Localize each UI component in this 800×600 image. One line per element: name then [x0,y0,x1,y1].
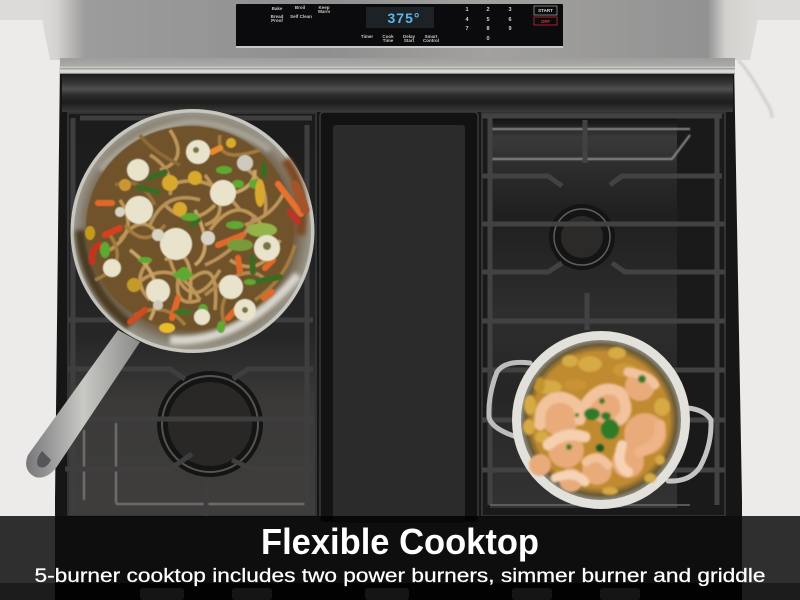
oven function labels: Delay [403,34,415,39]
oven function labels: Warm [318,9,330,14]
oven function labels: Cook [382,34,394,39]
oven function labels: Bake [272,6,283,11]
keypad digits: 2 [486,7,490,13]
oven function labels: Timer [361,34,373,39]
oven function labels: Proof [271,18,283,23]
keypad digits: 4 [465,17,469,23]
carrots [92,148,305,322]
oven function labels: Smart [425,34,438,39]
keypad digits: 9 [508,26,512,32]
right burner area [482,113,725,516]
keypad digits: 7 [465,26,469,32]
oven function labels: Time [383,38,394,43]
chrome burner tray highlights [490,129,690,159]
oven function labels: Bread [271,14,284,19]
parsley [566,375,646,452]
start and off buttons: OFF [541,19,550,24]
small pot [512,331,690,509]
burner knobs [140,588,640,600]
title: Flexible Cooktop [261,521,539,562]
back vent strip [62,74,733,112]
keypad digits: 6 [508,17,512,23]
shrimp curls [540,372,660,482]
control panel [236,4,563,48]
range body [55,60,742,600]
oven function labels [271,5,439,43]
pot handles [489,362,711,481]
wall behind range [0,0,800,20]
shrimp bodies [529,371,666,492]
left burner area [65,113,316,516]
keypad digits: 1 [465,7,469,13]
stir fry food [85,126,305,333]
caption band [0,516,800,600]
oven function labels: Keep [318,5,330,10]
lower range body under caption [55,516,742,583]
griddle [320,112,478,523]
left grate bars [65,118,313,516]
darker lower strip [0,583,800,600]
keypad digits [465,7,512,42]
keypad digits: 8 [486,26,490,32]
yellow peppers and corn [85,138,265,333]
oven function labels: Start [404,38,415,43]
oven function labels: Broil [295,5,305,10]
keypad digits: 3 [508,7,512,13]
left power burner [157,371,263,477]
subtitle: 5-burner cooktop includes two power burners, simmer burner and griddle [34,566,766,587]
oven function labels: Self Clean [290,14,312,19]
start and off buttons: START [538,8,553,13]
oven function labels: Control [423,38,439,43]
frying pan [70,109,314,353]
oven temperature display: 375° [388,10,420,26]
scallops and squid [103,140,280,325]
pan wall highlights [80,122,302,340]
right grate bars [482,116,725,505]
keypad digits: 0 [486,36,490,42]
green beans and herbs [138,165,280,282]
shrimp and garlic [523,347,670,495]
start and off buttons [534,6,557,25]
garlic pieces [523,347,670,495]
frying pan handle [26,330,140,478]
keypad digits: 5 [486,17,490,23]
backsplash steel panel [38,0,762,60]
marble vein [738,60,772,118]
noodles [95,130,295,325]
right simmer burner [549,204,615,270]
chrome burner tray highlights [84,423,305,504]
top rim of cooktop [60,58,735,74]
right lower tray line [490,504,690,506]
